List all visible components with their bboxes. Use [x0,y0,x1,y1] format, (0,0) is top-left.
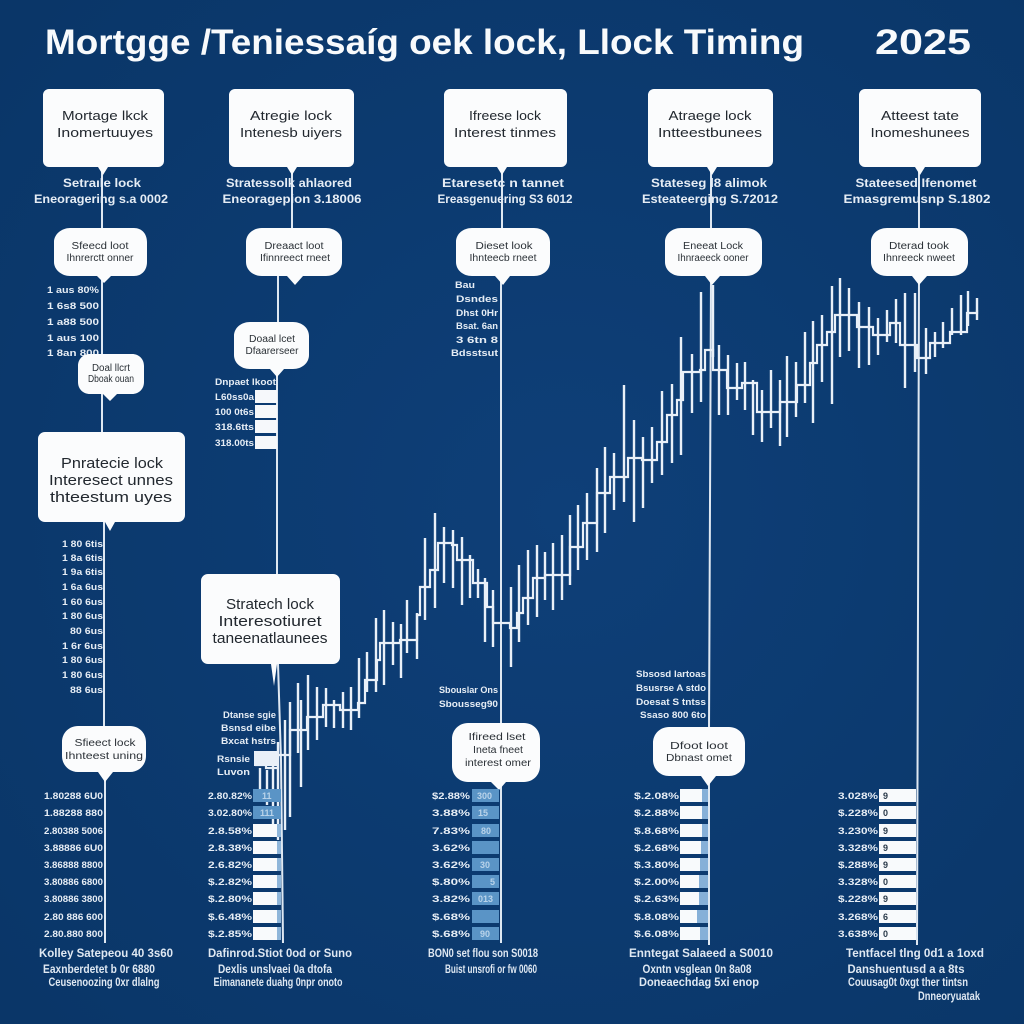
subheading 1: Eneoragering s.a 0002 [34,192,168,206]
bar rows 2 lower: $.2.85% [208,929,253,940]
subheading 5 [844,176,991,206]
callout: top box 4: Atraege lock [668,108,752,123]
callout: top box 1 [43,89,164,175]
bar rows 2 lower: 2.8.58% [208,826,253,837]
bubble 3: Sfieect lock [74,738,137,749]
rate labels 1 middle: 88 6us [70,685,103,696]
bar rows 4 lower: $.6.08% [634,929,680,940]
callout: large box 1: Pnratecie lock [61,455,164,472]
subheading 1 [34,176,168,206]
mini bars 2 upper: 100 0t6s [215,407,254,418]
bubble 10: Dterad took [889,241,950,252]
bubble 9: Dfoot loot [670,741,728,752]
rate labels 1 lower: 1.88288 880 [44,808,103,819]
bar rows 4 lower [634,789,708,940]
bubble 8 [665,228,762,285]
rate labels 1 lower: 3.80886 6800 [44,877,103,888]
bar rows 5 lower: $.228% [838,808,879,819]
subheading 4: Stateseg l8 alimok [651,176,767,190]
bar rows 2 lower: 2.8.38% [208,843,253,854]
bubble 5 [234,322,309,377]
footnote 3 [428,948,538,976]
bar rows 3 lower: $.68% [432,912,471,923]
rate labels 3 middle: Sbouslar Ons [439,685,498,696]
rate labels 1 upper: 1 6s8 500 [47,301,99,312]
bubble 5: Doaal lcet [249,334,295,345]
candlestick price chart [254,278,977,840]
footnote 1: Eaxnberdetet b 0r 6880 [43,964,155,976]
subheading 3: Ereasgenuering S3 6012 [438,192,573,206]
footnote 4: Enntegat Salaeed a S0010 [629,948,773,960]
footnote 4: Doneaechdag 5xi enop [639,977,759,989]
rate labels 1 lower: 2.80 886 600 [44,912,103,923]
bar rows 2 lower: 2.80.82% [208,791,253,802]
bar rows 3 lower: 30 [480,860,490,870]
rate labels 3 middle [439,685,498,710]
rate labels 1 lower: 3.80886 3800 [44,894,103,905]
callout: top box 5 [859,89,981,175]
bubble 3: Ihnteest uning [65,751,143,762]
footnote 1: Kolley Satepeou 40 3s60 [39,948,173,960]
rate labels 1 middle: 1 80 6us [62,655,103,666]
bubble 6: Dieset look [476,241,534,252]
bubble 9 [653,727,745,786]
callout: top box 3: Interest tinmes [454,125,557,140]
subheading 3: Etaresetc n tannet [442,176,564,190]
bar rows 5 lower: 6 [883,912,888,922]
rate labels 1 middle: 1 6r 6us [62,641,103,652]
footnote 2: Eimananete duahg 0npr onoto [214,977,342,989]
footnote 5 [846,948,984,1003]
bar rows 5 lower: 3.230% [838,826,879,837]
bubble 10 [871,228,968,285]
bubble 1 [54,228,147,283]
footnote 2 [208,948,352,989]
bar rows 5 lower: 9 [883,826,888,836]
rate labels 1 upper: 1 a88 500 [47,317,99,328]
bar rows 3 lower: $.80% [432,877,471,888]
rate labels 1 upper: 1 aus 100 [47,333,99,344]
bar rows 5 lower: 9 [883,791,888,801]
bar rows 5 lower: 0 [883,877,888,887]
bar rows 5 lower: 3.638% [838,929,879,940]
rate labels 2 middle: Bsnsd eibe [221,723,276,734]
bubble 8: Ihnraeeck ooner [678,253,749,264]
bar rows 3 lower: 90 [480,929,490,939]
mini bars 2 upper: 318.6tts [215,422,254,433]
callout: top box 5: Atteest tate [881,108,959,123]
bar rows 3 lower: 5 [490,877,495,887]
rate labels 1 lower: 1.80288 6U0 [44,791,103,802]
footnote 1 [39,948,173,989]
callout: top box 3: Ifreese lock [469,108,542,123]
rate labels 1 lower: 2.80388 5006 [44,826,103,837]
rate labels 1 middle: 1 80 6us [62,611,103,622]
rate labels 1 middle: 1 8a 6tis [62,553,103,564]
bubble 4 [246,228,342,285]
callout: large box 2: Interesotiuret [218,613,322,630]
rate labels 3 upper: Bau [455,280,475,291]
rate labels 1 middle: 1 80 6tis [62,539,103,550]
bubble 2: Dboak ouan [88,374,134,385]
footnote 5: Danshuentusd a a 8ts [848,964,964,976]
rate labels 4 middle: Doesat S tntss [636,697,706,708]
footnote 2: Dafinrod.Stiot 0od or Suno [208,948,352,960]
subheading 4: Esteateerging S.72012 [642,192,778,206]
rate labels 1 middle: 80 6us [70,626,103,637]
mini bars 2 upper: Dnpaet lkoot [215,377,277,388]
callout: top box 2: Atregie lock [250,108,333,123]
bubble 5: Dfaarerseer [246,346,299,357]
footnote 1: Ceusenoozing 0xr dlalng [48,977,160,989]
subheading 1: Setraıle lock [63,176,141,190]
callout: large box 1: Interesect unnes [49,472,173,489]
rate labels 1 middle: 1 6a 6us [62,582,103,593]
callout: top box 4 [648,89,773,175]
callout: top box 4: Intteestbunees [658,125,763,140]
callout: top box 5: Inomeshunees [870,125,970,140]
bubble 2 [78,354,144,401]
column 2 [201,89,362,989]
rate labels 3 upper: Bsat. 6an [456,321,498,332]
callout: top box 1: Inomertuuyes [57,125,154,140]
rate labels 3 upper: 3 6tn 8 [456,335,498,346]
bar rows 3 lower: 3.62% [432,843,471,854]
rate labels 3 upper [451,280,499,359]
year: 2025 [875,23,971,62]
column 4 [629,89,778,989]
bar rows 3 lower: 3.62% [432,860,471,871]
subheading 3 [438,176,573,206]
bar rows 5 lower: $.228% [838,894,879,905]
rate labels 1 upper [47,285,100,359]
bubble 8: Eneeat Lock [683,241,744,252]
bubble 6: Ihnteecb rneet [470,253,537,264]
bar rows 2 lower: $.2.82% [208,877,253,888]
bar rows 5 lower: 9 [883,843,888,853]
mini bars 2 upper: L60ss0a [215,392,255,403]
callout: large box 2: taneenatlaunees [212,630,328,647]
footnote 5: Tentfacel tlng 0d1 a 1oxd [846,948,984,960]
column 3 [428,89,573,976]
bar rows 4 lower: $.2.68% [634,843,680,854]
mini bars 2 upper [215,377,277,449]
bar rows 5 lower: 9 [883,860,888,870]
rate labels 3 upper: Dsndes [456,294,498,305]
rate labels 4 middle: Bsusrse A stdo [636,683,706,694]
bar rows 3 lower: $2.88% [432,791,471,802]
callout: bubble 7: Ifireed lset [468,732,526,743]
footnote 5: Dnneoryuatak [918,991,980,1003]
bar rows 5 lower: 3.328% [838,877,879,888]
callout: top box 2: Intenesb uiyers [240,125,343,140]
rate labels 1 lower: 2.80.880 800 [44,929,103,940]
footnote 3: BON0 set flou son S0018 [428,948,538,960]
subheading 2: Stratessolk ahlaored [226,176,352,190]
subheading 5: Stateesed Ifenomet [856,176,976,190]
title: Mortgge /Teniessaíg oek lock, Llock Timing [45,23,804,62]
column 1 [34,89,185,989]
bar rows 5 lower: 0 [883,929,888,939]
bar rows 5 lower: 3.028% [838,791,879,802]
bar rows 4 lower: $.8.68% [634,826,680,837]
rate labels 4 middle [636,669,706,721]
bubble 9: Dbnast omet [666,753,732,764]
bar rows 3 lower: 15 [478,808,488,818]
bar rows 4 lower: $.2.00% [634,877,680,888]
bar rows 4 lower: $.2.88% [634,808,680,819]
rate labels 3 middle: Sbousseg90 [439,699,498,710]
bar rows 2 lower: $.6.48% [208,912,253,923]
callout: top box 1: Mortage lkck [62,108,149,123]
callout: large box 2: Stratech lock [226,596,314,613]
bar rows 3 lower: 7.83% [432,826,471,837]
rate labels 4 middle: Ssaso 800 6to [640,710,706,721]
bar rows 5 lower: 3.268% [838,912,879,923]
callout: bubble 7: interest omer [465,758,532,769]
bar rows 2 lower [208,789,281,940]
bar rows 3 lower: $.68% [432,929,471,940]
subheading 2: Eneoragepion 3.18006 [222,192,362,206]
footnote 2: Dexlis unslvaei 0a dtofa [218,964,333,976]
bar rows 4 lower: $.2.08% [634,791,680,802]
bar rows 3 lower: 80 [481,826,491,836]
bar rows 2 lower: 111 [260,808,274,818]
bar rows 2 lower: 11 [262,791,272,801]
bar rows 5 lower: 3.328% [838,843,879,854]
bubble 10: Ihnreeck nweet [883,253,955,264]
rate labels 3 upper: Dhst 0Hr [456,308,498,319]
rate labels 1 upper: 1 8an 800 [47,348,99,359]
bar rows 3 lower: 3.88% [432,808,471,819]
bar rows 5 lower: 0 [883,808,888,818]
bubble 4: Dreaact loot [264,241,324,252]
mini bars 2 upper: 318.00ts [215,438,254,449]
footnote 5: Couusag0t 0xgt ther tintsn [848,977,968,989]
subheading 4 [642,176,778,206]
bar rows 4 lower: $.3.80% [634,860,680,871]
column 5 [838,89,991,1003]
footnote 4 [629,948,773,989]
rate labels 3 upper: Bdsstsut [451,348,499,359]
bubble 3 [62,726,146,782]
rate labels 2 middle: Luvon [217,767,250,778]
rate labels 1 middle: 1 80 6us [62,670,103,681]
bar rows 3 lower: 3.82% [432,894,471,905]
rate labels 2 middle: Rsnsie [217,754,250,765]
subheading 5: Emasgremusnp S.1802 [844,192,991,206]
rate labels 1 middle: 1 60 6us [62,597,103,608]
timeline lines [102,168,919,945]
rate labels 2 middle [217,710,276,778]
bar rows 2 lower: 3.02.80% [208,808,253,819]
bar rows 4 lower: $.8.08% [634,912,680,923]
rate labels 1 lower: 3.88886 6U0 [44,843,103,854]
rate labels 4 middle: Sbsosd lartoas [636,669,706,680]
bar rows 5 lower [838,789,916,940]
callout: large box 1 [38,432,185,531]
bar rows 3 lower: 013 [478,894,493,904]
rate labels 1 upper: 1 aus 80% [47,285,100,296]
bubble 2: Doal llcrt [92,363,130,374]
bubble 4: Ifinnreect rneet [260,253,330,264]
callout: bubble 7: Ineta fneet [473,745,523,756]
rate labels 1 middle: 1 9a 6tis [62,567,103,578]
bar rows 2 lower: 2.6.82% [208,860,253,871]
callout: top box 3 [444,89,567,175]
bar rows 3 lower: 300 [477,791,492,801]
callout: large box 2 [201,574,340,686]
bar rows 4 lower: $.2.63% [634,894,680,905]
footnote 3: Buist unsrofi or fw 0060 [445,964,537,976]
callout: large box 1: thteestum uyes [50,489,172,506]
subheading 2 [222,176,362,206]
rate labels 2 middle: Bxcat hstrs [221,736,276,747]
rate labels 1 lower: 3.86888 8800 [44,860,103,871]
bubble 6 [456,228,550,285]
rate labels 1 lower [44,791,103,940]
bar rows 5 lower: $.288% [838,860,879,871]
bar rows 5 lower: 9 [883,894,888,904]
bar rows 3 lower [432,789,499,940]
callout: top box 2 [229,89,354,175]
bubble 1: Ihnrerctt onner [66,253,134,264]
bubble 1: Sfeecd loot [72,241,129,252]
footnote 4: Oxntn vsglean 0n 8a08 [642,964,752,976]
rate labels 2 middle: Dtanse sgie [223,710,276,721]
rate labels 1 middle [62,539,103,696]
bar rows 2 lower: $.2.80% [208,894,253,905]
callout: bubble 7 [452,723,540,790]
